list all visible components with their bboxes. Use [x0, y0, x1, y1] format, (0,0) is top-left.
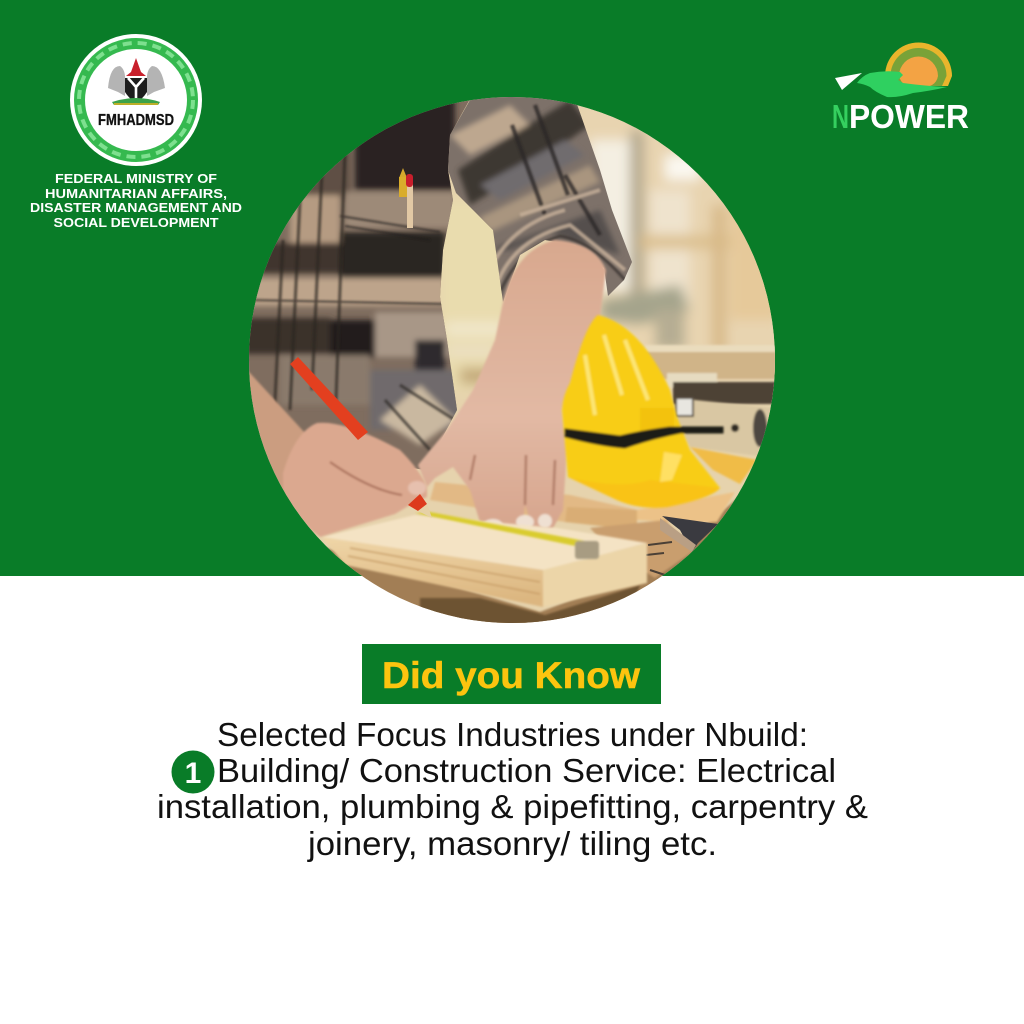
- left forearm and hand: [240, 365, 427, 537]
- workshop background: [440, 105, 780, 405]
- icon: white paper: [835, 73, 862, 90]
- bench behind helmet: [645, 345, 780, 404]
- ministry name: HUMANITARIAN AFFAIRS,: [45, 187, 227, 201]
- green header background: [0, 0, 1024, 576]
- back wood pieces: [430, 447, 757, 578]
- NPOWER wordmark: POWER: [849, 99, 969, 136]
- body text: Building/ Construction Service: Electrical: [217, 752, 836, 789]
- circular photo: carpenter measuring wood: [240, 90, 780, 640]
- number badge 1: 1: [185, 757, 201, 790]
- body text: Selected Focus Industries under Nbuild:: [217, 716, 808, 753]
- body text: joinery, masonry/ tiling etc.: [307, 825, 717, 862]
- body text: [157, 716, 868, 862]
- pens in pocket: [399, 168, 413, 228]
- right arm and hand: [418, 240, 606, 534]
- measuring tape: [415, 512, 599, 559]
- ministry name: SOCIAL DEVELOPMENT: [54, 216, 219, 230]
- yellow hard hat: [562, 315, 722, 508]
- red carpenter pencil: [290, 357, 432, 518]
- icon: sun: [885, 42, 952, 88]
- heading: Did you Know: [362, 644, 661, 704]
- heading: Did you Know: Did you Know: [382, 655, 640, 696]
- NPOWER logo: [832, 42, 969, 136]
- coat of arms: [108, 58, 165, 105]
- body text: installation, plumbing & pipefitting, carpentry &: [157, 788, 868, 825]
- NPOWER wordmark: N: [832, 99, 849, 136]
- main wood plank: [322, 515, 647, 607]
- ministry logo badge: [70, 34, 202, 166]
- ministry name: DISASTER MANAGEMENT AND: [30, 201, 242, 215]
- ministry name: FEDERAL MINISTRY OF: [55, 172, 217, 186]
- work surface: [327, 499, 735, 623]
- nails and square tool: [646, 516, 718, 575]
- FMHADMSD wordmark: FMHADMSD: [98, 112, 174, 129]
- rolled sleeve with plaid: [448, 97, 632, 302]
- number badge 1: [172, 750, 214, 794]
- spirit level: [676, 398, 772, 456]
- icon: green hand: [857, 71, 947, 97]
- shirt body with plaid: [249, 100, 470, 470]
- ministry name: [30, 172, 242, 230]
